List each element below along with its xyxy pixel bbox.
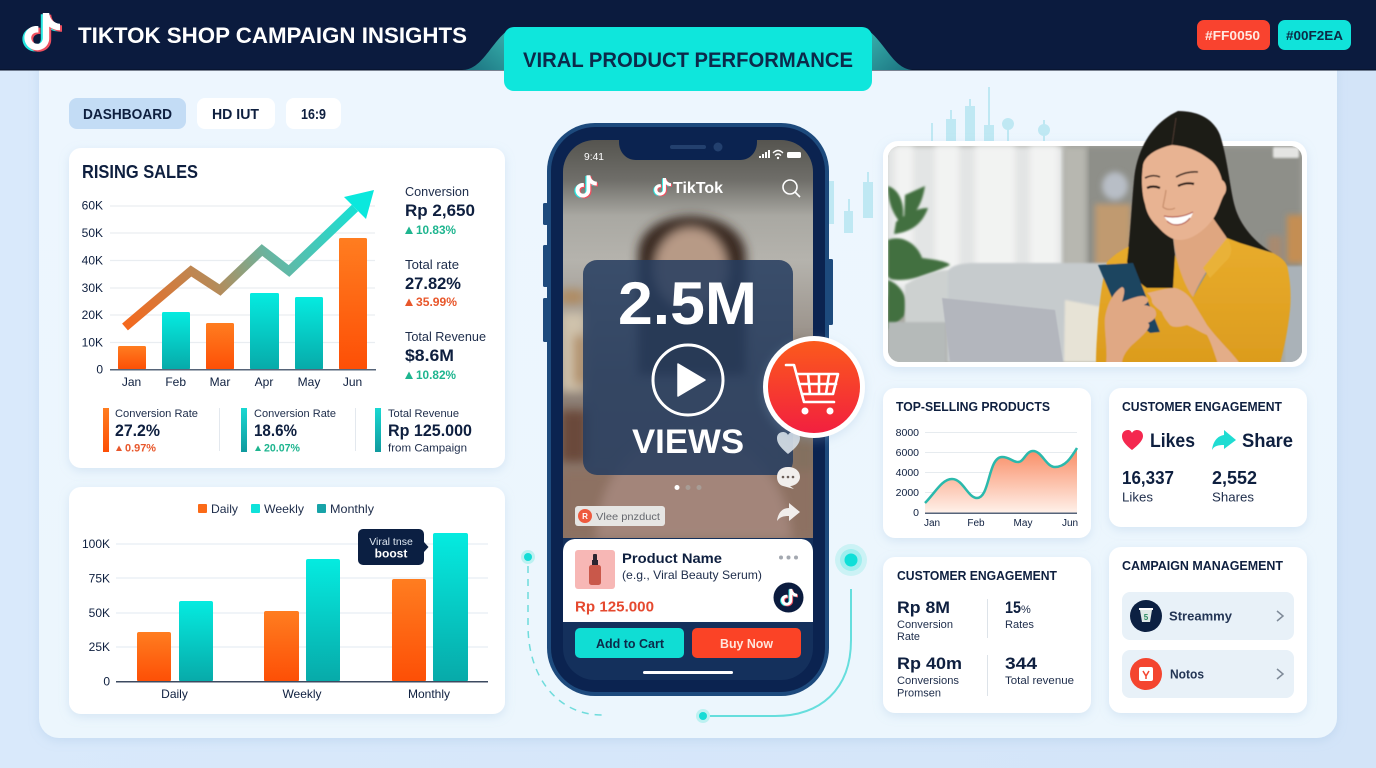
- stat: total revenue from campaign: Total Revenue: [388, 408, 459, 420]
- bar chart: monthly sales: Apr: [255, 375, 273, 389]
- stat: conversion rate 27.2%: Conversion Rate: [115, 408, 198, 420]
- icon: heart: [777, 432, 800, 454]
- bar chart: monthly sales: 0: [96, 362, 103, 376]
- sofa: [888, 263, 1305, 364]
- stat: conversion rate 27.2%: 27.2%: [115, 421, 160, 440]
- collar: [1203, 238, 1231, 278]
- icon: TikTok logo: [22, 13, 62, 52]
- tab: ratio: 16:9: [301, 107, 326, 123]
- bars: daily: [137, 601, 213, 682]
- panel: customer engagement revenue: Rate: [897, 631, 920, 643]
- panel: customer engagement likes and shares: 16,337: [1122, 468, 1174, 488]
- stat: conversion rate 27.2%: 0.97%: [125, 442, 156, 454]
- panel: customer engagement revenue: Rp 8M: [897, 598, 950, 617]
- icon: share: [1212, 430, 1236, 450]
- bar chart: monthly sales: Jan: [122, 375, 141, 389]
- area chart: top-selling: Jun: [1062, 518, 1078, 529]
- chip: view product: R: [582, 512, 588, 521]
- bar chart: monthly sales: 40K: [82, 254, 103, 268]
- hair: [1127, 111, 1273, 288]
- stat: conversion: Rp 2,650: [405, 201, 475, 220]
- area chart: top-selling: 8000: [896, 427, 919, 439]
- panel: customer engagement revenue: 15: [1005, 598, 1021, 617]
- stat: total revenue: [405, 330, 486, 382]
- tab: ratio: [286, 98, 341, 129]
- panel: daily weekly monthly chart: 0: [103, 674, 110, 688]
- legend: Daily: [211, 502, 238, 516]
- stat: conversion rate 27.2%: [103, 408, 198, 454]
- notch: [619, 140, 757, 160]
- bar chart: monthly sales: [82, 190, 376, 389]
- icon: TikTok badge: [774, 582, 804, 612]
- row: streammy: Streammy: [1169, 608, 1233, 624]
- icon: play: [653, 345, 723, 415]
- panel: customer engagement likes and shares: Likes: [1150, 431, 1195, 452]
- bar chart: monthly sales: 50K: [82, 226, 103, 240]
- stat: conversion: Conversion: [405, 185, 469, 199]
- woman: [1096, 111, 1291, 364]
- panel: daily weekly monthly chart: Monthly: [408, 687, 450, 701]
- product card: (e.g., Viral Beauty Serum): [622, 568, 762, 582]
- product image: serum: [575, 550, 615, 589]
- heading: rising sales: RISING SALES: [82, 162, 198, 182]
- panel: rising sales: [69, 148, 505, 468]
- product card: Product Name: [622, 550, 722, 566]
- panel: daily weekly monthly chart: Daily: [161, 687, 188, 701]
- bar chart: monthly sales: 20K: [82, 308, 103, 322]
- icon: search: [783, 180, 800, 197]
- panel: customer engagement revenue: Conversions: [897, 675, 960, 687]
- legend: Weekly: [264, 502, 304, 516]
- stat: conversion: 10.83%: [416, 223, 456, 237]
- icon: heart: [1122, 430, 1143, 450]
- photo background: [885, 146, 1305, 364]
- hair part: [1172, 118, 1176, 145]
- stat: conversion rate 18.6%: 18.6%: [254, 421, 297, 440]
- panel: customer engagement likes and shares: [1109, 388, 1307, 527]
- smile: [1164, 212, 1193, 225]
- TikTok wordmark: TikTok: [673, 180, 723, 197]
- panel: daily weekly monthly chart: 50K: [89, 606, 110, 620]
- icon: TikTok small logo: [574, 175, 598, 198]
- legend: Monthly: [330, 502, 374, 516]
- stat: total rate: 27.82%: [405, 274, 461, 293]
- product card: [563, 539, 813, 622]
- panel: customer engagement likes and shares: 2,552: [1212, 468, 1257, 488]
- icon: comment: [777, 467, 800, 489]
- stat: conversion rate 18.6%: [241, 408, 336, 454]
- stat: total rate: [405, 258, 461, 309]
- phone mockup: [543, 123, 833, 696]
- views overlay: [583, 260, 793, 475]
- stat: total revenue: 10.82%: [416, 368, 456, 382]
- area chart: top-selling: 4000: [896, 467, 919, 479]
- stat: conversion rate 18.6%: 20.07%: [264, 442, 300, 454]
- stat: total revenue: Total Revenue: [405, 330, 486, 344]
- chip: view product: [575, 506, 665, 526]
- big number: 2.5M: 2.5M: [618, 270, 757, 337]
- decorative candlesticks: [826, 87, 1050, 233]
- panel: customer engagement revenue: Rates: [1005, 619, 1034, 631]
- heading tab: viral product performance: [462, 27, 914, 91]
- panel: daily weekly monthly chart: [69, 487, 505, 714]
- callout: viral boost: Viral tnse: [369, 536, 413, 548]
- TikTok wordmark: [653, 178, 723, 197]
- icon: share: [777, 503, 800, 521]
- stat: total rate: 35.99%: [416, 295, 457, 309]
- tab: HD: [197, 98, 275, 129]
- row: notos: [1122, 650, 1294, 698]
- bar chart: monthly sales: Mar: [210, 375, 230, 389]
- bars: weekly: [264, 559, 340, 682]
- bar chart: monthly sales: 10K: [82, 336, 103, 350]
- plant: [888, 186, 950, 330]
- panel: campaign management: CAMPAIGN MANAGEMENT: [1122, 559, 1283, 573]
- panel: customer engagement revenue: CUSTOMER ENGAGEMENT: [897, 569, 1057, 583]
- laptop: [942, 298, 1063, 362]
- area chart: top-selling: Jan: [924, 518, 940, 529]
- color chip: red: #FF0050: [1205, 28, 1260, 43]
- arrow: rising trend: [125, 190, 374, 327]
- tab: dashboard: [69, 98, 186, 129]
- right hand and arm: [1147, 288, 1240, 364]
- area chart: top-selling: Feb: [967, 518, 985, 529]
- button: add to cart: [575, 628, 684, 658]
- status bar: 9:41: [584, 151, 604, 163]
- header bar: [0, 0, 1376, 70]
- phone in hand: [1098, 263, 1160, 333]
- panel: customer engagement likes and shares: Likes: [1122, 490, 1153, 504]
- panel: daily weekly monthly chart: Weekly: [282, 687, 322, 701]
- stat: total revenue from campaign: Rp 125.000: [388, 421, 472, 440]
- carousel dots: [674, 485, 702, 490]
- panel: customer engagement revenue: %: [1021, 604, 1031, 616]
- panel: customer engagement revenue: Rp 40m: [897, 654, 962, 673]
- tab: HD: HD IUT: [212, 107, 259, 123]
- color chip: red: [1197, 20, 1270, 50]
- bar chart: monthly sales: Feb: [165, 375, 186, 389]
- panel: customer engagement revenue: [883, 557, 1091, 713]
- stat: total revenue: $8.6M: [405, 346, 454, 365]
- eyes and brows: [1145, 172, 1198, 178]
- left hand: [1105, 287, 1156, 364]
- button: add to cart: Add to Cart: [596, 637, 665, 651]
- panel: customer engagement likes and shares: Share: [1242, 431, 1293, 452]
- panel: top-selling products: [883, 388, 1091, 538]
- callout: viral boost: [358, 529, 428, 565]
- bar chart: monthly sales: May: [298, 375, 320, 389]
- panel: customer engagement revenue: 344: [1005, 654, 1038, 673]
- bar chart: monthly sales: 30K: [82, 281, 103, 295]
- photo: woman with phone: [883, 111, 1307, 367]
- tab: dashboard: DASHBOARD: [83, 107, 172, 123]
- row: streammy: 5: [1144, 613, 1149, 622]
- shirt: [1096, 238, 1291, 364]
- icon: cart badge: [763, 336, 865, 438]
- stat: conversion: [405, 185, 475, 237]
- row: streammy: [1122, 592, 1294, 640]
- label: views: VIEWS: [632, 423, 744, 461]
- status bar: [584, 150, 801, 163]
- panel: top-selling products: TOP-SELLING PRODUCTS: [896, 400, 1050, 414]
- panel: customer engagement revenue: Promsen: [897, 688, 941, 700]
- panel: customer engagement revenue: Conversion: [897, 619, 953, 631]
- area chart: top-selling: [896, 427, 1078, 529]
- button: buy now: Buy Now: [720, 637, 773, 651]
- bar chart: monthly sales: Jun: [343, 375, 362, 389]
- button: buy now: [692, 628, 801, 658]
- panel: daily weekly monthly chart: 25K: [89, 640, 110, 654]
- phone screen: [560, 140, 816, 680]
- connector: right line: [696, 544, 867, 723]
- area chart: top-selling: 2000: [896, 487, 919, 499]
- title: TIKTOK SHOP CAMPAIGN INSIGHTS: [78, 23, 467, 48]
- stat: total rate: Total rate: [405, 258, 459, 272]
- row: notos: Notos: [1170, 666, 1204, 682]
- color chip: teal: [1278, 20, 1351, 50]
- area chart: top-selling: 0: [913, 507, 919, 519]
- heading tab: viral product performance: VIRAL PRODUCT PERFORMANCE: [523, 49, 853, 72]
- area chart: top-selling: 6000: [896, 447, 919, 459]
- panel: customer engagement likes and shares: CUSTOMER ENGAGEMENT: [1122, 400, 1282, 414]
- callout: viral boost: boost: [375, 546, 407, 560]
- color chip: teal: #00F2EA: [1286, 28, 1344, 43]
- panel: daily weekly monthly chart: 100K: [82, 537, 110, 551]
- stat: total revenue from campaign: from Campaign: [388, 442, 467, 454]
- area chart: top-selling: May: [1014, 518, 1032, 529]
- panel: customer engagement revenue: Total revenue: [1005, 675, 1074, 687]
- home indicator: [643, 671, 733, 674]
- bar chart: monthly sales: 60K: [82, 198, 103, 212]
- product card: Rp 125.000: [575, 598, 654, 616]
- panel: customer engagement likes and shares: Shares: [1212, 490, 1254, 504]
- chip: view product: Vlee pnzduct: [596, 511, 660, 523]
- stat: conversion rate 18.6%: Conversion Rate: [254, 408, 336, 420]
- bars: monthly: [392, 533, 468, 682]
- connector: left dashed: [521, 550, 602, 715]
- face: [1142, 145, 1226, 240]
- panel: campaign management: [1109, 547, 1307, 713]
- stat: total revenue from campaign: [375, 408, 472, 454]
- legend: [198, 502, 374, 516]
- panel: daily weekly monthly chart: 75K: [89, 572, 110, 586]
- nose: [1163, 190, 1175, 209]
- neck: [1173, 212, 1227, 297]
